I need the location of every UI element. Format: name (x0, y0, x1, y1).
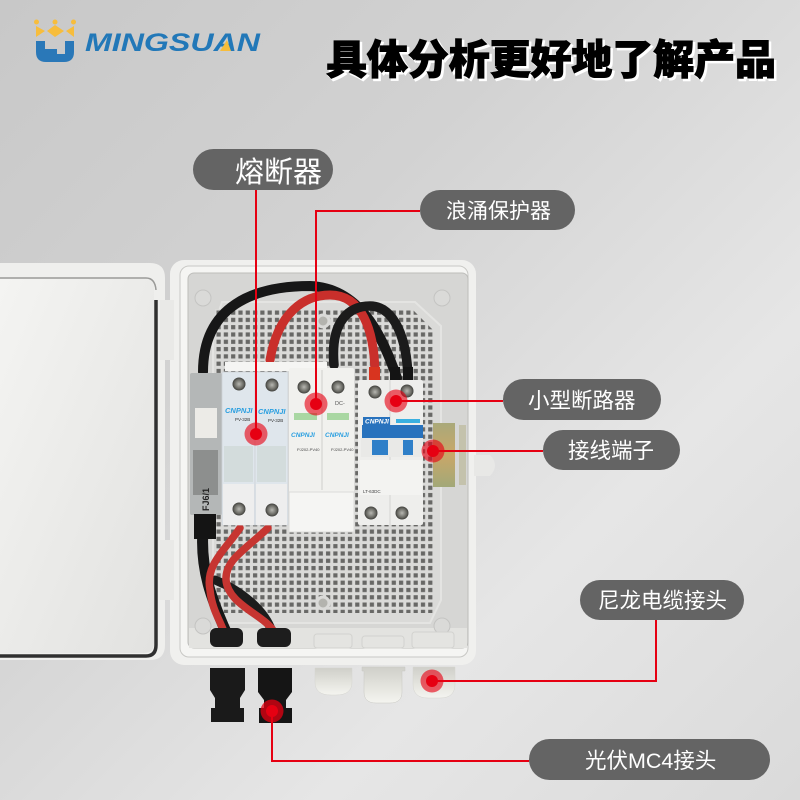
marker: MC4 (260, 700, 284, 722)
callout lines (256, 190, 656, 761)
MC4 connector 2 (258, 668, 292, 723)
cable gland 3 (413, 667, 455, 698)
enclosure rim (180, 266, 468, 657)
fuse holders (222, 362, 327, 525)
marker: nylon gland (420, 670, 444, 692)
surge protector: PJ202-PV40 (297, 447, 320, 452)
MC4 connector 1 (210, 668, 245, 722)
busbar label: FJ6/1 (201, 488, 211, 511)
label: miniature breaker (503, 379, 661, 420)
hole grid (215, 309, 433, 613)
label: fuse (193, 149, 333, 190)
fuse holders: CNPNJI (258, 407, 286, 416)
title: 具体分析更好地了解产品 (328, 39, 778, 85)
right latch (474, 455, 495, 476)
marker: surge (304, 392, 328, 416)
breaker label: CNPNJI (365, 418, 389, 426)
screw: bottom (317, 597, 329, 609)
black cables bottom (203, 530, 226, 632)
circuit breaker (358, 380, 423, 525)
marker dots (244, 390, 444, 722)
cable sleeves (369, 367, 413, 380)
fuse holders: PV-32B (268, 418, 283, 423)
surge labels: CNPNJI (291, 432, 315, 439)
door gasket (0, 300, 156, 656)
screw posts (195, 290, 211, 306)
label: surge protector (420, 190, 575, 230)
icon: logo triangle (220, 40, 231, 51)
label: terminal (543, 430, 680, 470)
door gasket top (0, 278, 156, 290)
surge protector: DC- (335, 401, 345, 407)
bottom wall (189, 628, 467, 648)
label: nylon cable gland: 尼龙电缆接头 (598, 589, 727, 613)
cables (203, 286, 408, 632)
black cable loop (333, 306, 408, 378)
label: PV MC4 connector (529, 739, 770, 780)
red cable top (270, 295, 375, 372)
label: terminal: 接线端子 (568, 439, 654, 463)
enclosure inner (188, 273, 468, 648)
fuse holders: PV-32B (235, 417, 250, 422)
screw: top (317, 315, 329, 327)
busbar (190, 373, 222, 539)
open door (0, 263, 165, 660)
red cables bottom (209, 528, 240, 632)
marker: breaker (384, 390, 408, 412)
logo wordmark: MINGSUAN (85, 29, 261, 57)
cable gland 2 (362, 667, 405, 703)
black cable left (203, 286, 397, 378)
surge protector: PJ202-PV40 (331, 447, 354, 452)
door panel (0, 279, 154, 653)
label: nylon cable gland (580, 580, 744, 620)
enclosure (160, 260, 495, 665)
title: 具体分析更好地了解产品 (326, 37, 776, 83)
gland nuts inside (210, 628, 291, 647)
din rail (433, 423, 466, 487)
surge protector (289, 368, 354, 532)
inner glands (314, 632, 454, 648)
surge protector: CNPNJI (325, 432, 349, 439)
hinge (160, 300, 174, 360)
label: surge protector: 浪涌保护器 (446, 200, 551, 223)
icon: G mark (36, 41, 74, 62)
marker: terminal (422, 440, 444, 462)
label: PV MC4 connector: 光伏MC4接头 (585, 749, 716, 773)
logo (34, 20, 261, 62)
icon: crown (34, 20, 76, 37)
perforated plate (213, 302, 441, 623)
cable gland 1 (315, 668, 352, 695)
fuse labels: CNPNJI (225, 406, 253, 415)
marker: fuse (244, 422, 268, 446)
label: miniature breaker: 小型断路器 (528, 389, 636, 413)
circuit breaker: LT-63DC (363, 489, 381, 494)
label: fuse: 熔断器 (235, 156, 322, 189)
